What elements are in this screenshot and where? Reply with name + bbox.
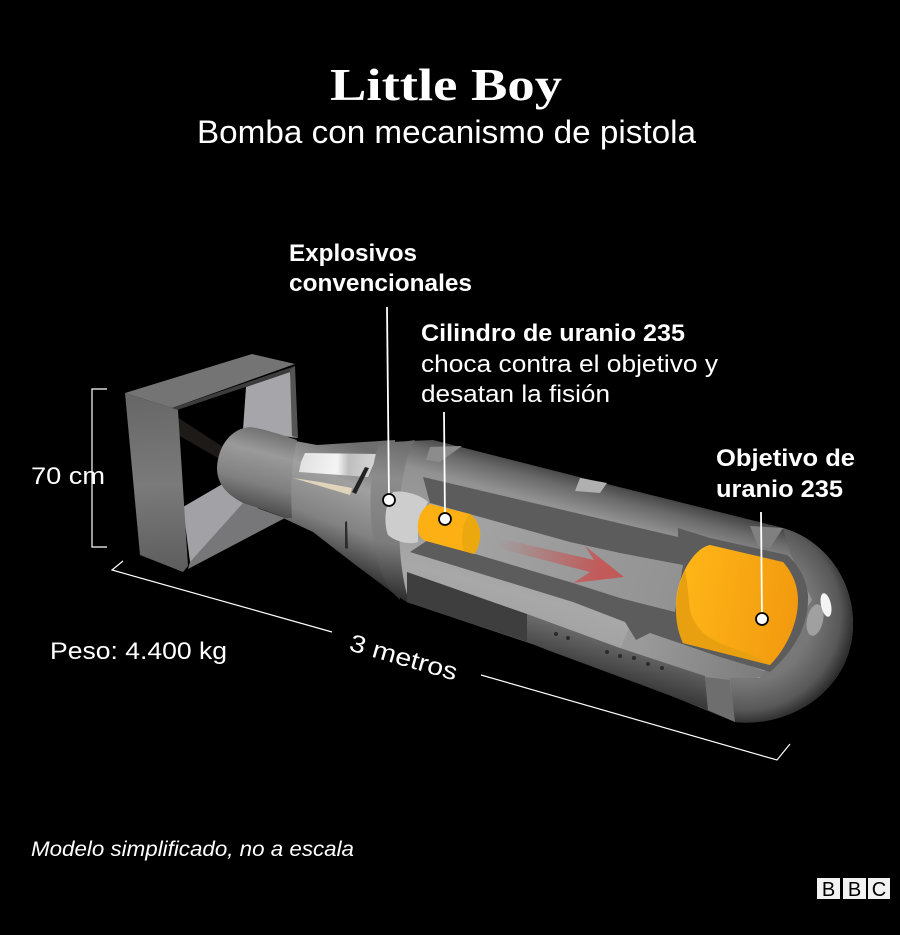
subtitle: Bomba con mecanismo de pistola: [197, 114, 696, 150]
small uranium cylinder: [418, 504, 480, 554]
label: uranium cylinder: Cilindro de uranio 235: [421, 320, 685, 347]
strap bottom: [705, 677, 735, 722]
label: uranium cylinder: [421, 320, 719, 408]
leader line and dot: explosives: [383, 307, 395, 506]
BBC logo: C: [872, 879, 886, 901]
weight label: Peso: 4.400 kg: [50, 638, 227, 665]
BBC logo: [817, 878, 890, 901]
bomb body: [379, 440, 853, 723]
BBC logo: B: [822, 879, 835, 901]
leader line and dot: target: [756, 512, 768, 625]
length dimension line: [112, 561, 790, 760]
BBC logo: B: [848, 879, 861, 901]
conventional explosive: [385, 491, 428, 543]
middle lit stripe: [428, 503, 683, 612]
body collar: [371, 440, 415, 604]
lower light strip near nose: [620, 625, 775, 682]
bomb illustration: [125, 354, 853, 723]
height dimension bracket: [92, 389, 107, 547]
length label: 3 metros: [346, 630, 460, 686]
label: uranium cylinder: desatan la fisión: [421, 381, 610, 408]
nose dome: [730, 528, 853, 723]
label: conventional explosives: [289, 240, 472, 297]
dark cutaway interior: [410, 477, 808, 672]
neck and flare: [217, 427, 400, 600]
rivets: [554, 632, 664, 670]
lower body panel: [527, 614, 708, 710]
label: conventional explosives: Explosivos: [289, 240, 417, 267]
label: uranium target: Objetivo de: [716, 445, 855, 472]
strap top: [750, 526, 783, 548]
label: uranium target: uranio 235: [716, 476, 843, 503]
label: uranium cylinder: choca contra el objetivo y: [421, 351, 719, 378]
label: uranium target: [716, 445, 855, 503]
top strap near collar: [426, 446, 462, 462]
large uranium target: [676, 545, 798, 665]
lower left dark panel: [407, 572, 527, 642]
top clamp: [575, 478, 607, 493]
footnote: Modelo simplificado, no a escala: [31, 837, 354, 861]
red arrow: [498, 538, 624, 583]
tail frame: [125, 354, 298, 572]
leader line and dot: cylinder: [439, 412, 451, 525]
height label: 70 cm: [31, 463, 105, 490]
label: conventional explosives: convencionales: [289, 270, 472, 297]
title: Little Boy: [330, 59, 562, 110]
dome highlights: [804, 592, 833, 637]
